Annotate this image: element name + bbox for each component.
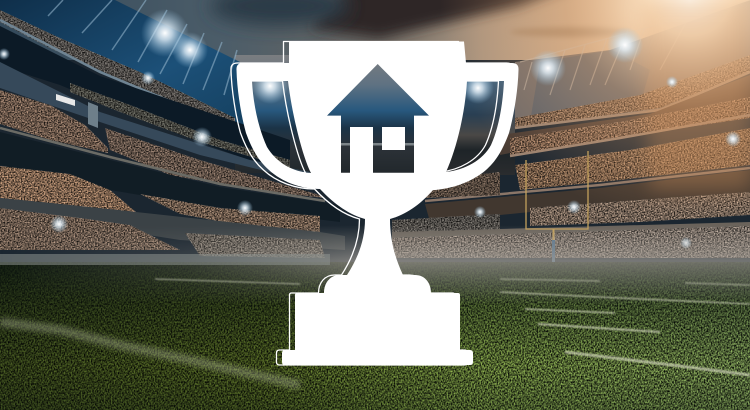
door left	[88, 102, 98, 128]
yard lines right	[155, 279, 750, 375]
right handle backdrop	[440, 75, 515, 175]
fifth crowd right	[392, 226, 750, 258]
concourse left	[0, 198, 345, 250]
crowd block centre-left	[105, 128, 325, 198]
goal post	[526, 151, 588, 265]
trophy outline offset	[231, 42, 513, 365]
second ledge right	[510, 115, 750, 156]
third crowd right part	[140, 194, 320, 232]
dark underside left	[0, 26, 290, 175]
concourse right	[392, 222, 750, 240]
dark band lower right	[425, 170, 750, 222]
concrete wall left	[0, 62, 310, 182]
fog over field edge	[50, 228, 750, 302]
stadium lights	[0, 9, 741, 249]
second crowd right	[510, 97, 750, 155]
lower crowd mid	[185, 233, 325, 258]
crowd near stem right	[425, 172, 500, 198]
grass field	[0, 262, 750, 410]
lower dark band left	[0, 132, 340, 222]
dark band right	[500, 75, 750, 155]
trophy with house cutout	[236, 42, 519, 365]
upper ledge right	[515, 72, 750, 128]
right roof panel	[515, 0, 750, 128]
upper crowd right	[515, 55, 750, 128]
third crowd right	[515, 128, 750, 190]
centre roof behind trophy	[235, 55, 465, 173]
second ledge left	[0, 128, 325, 201]
upper crowd left	[0, 10, 235, 128]
sky	[0, 0, 750, 140]
lower crowd left	[0, 208, 180, 250]
glare shaft	[640, 0, 750, 190]
trusses right	[520, 0, 750, 95]
second crowd left	[70, 83, 290, 168]
stadium base	[0, 60, 750, 265]
fourth crowd right	[530, 192, 750, 226]
centre ledge seen through house	[341, 143, 414, 146]
right stadium tiers	[392, 0, 750, 258]
third crowd left	[0, 166, 136, 212]
fog rail left	[0, 254, 330, 265]
sign left	[56, 94, 75, 106]
third ledge right	[425, 168, 750, 201]
upper ledge left	[0, 20, 235, 128]
left roof panel	[0, 0, 250, 128]
warm sun glare	[440, 0, 750, 220]
roof trusses	[48, 0, 237, 95]
crowd block left	[0, 90, 108, 153]
left stadium tiers	[0, 0, 345, 258]
left chalk line	[0, 322, 300, 385]
